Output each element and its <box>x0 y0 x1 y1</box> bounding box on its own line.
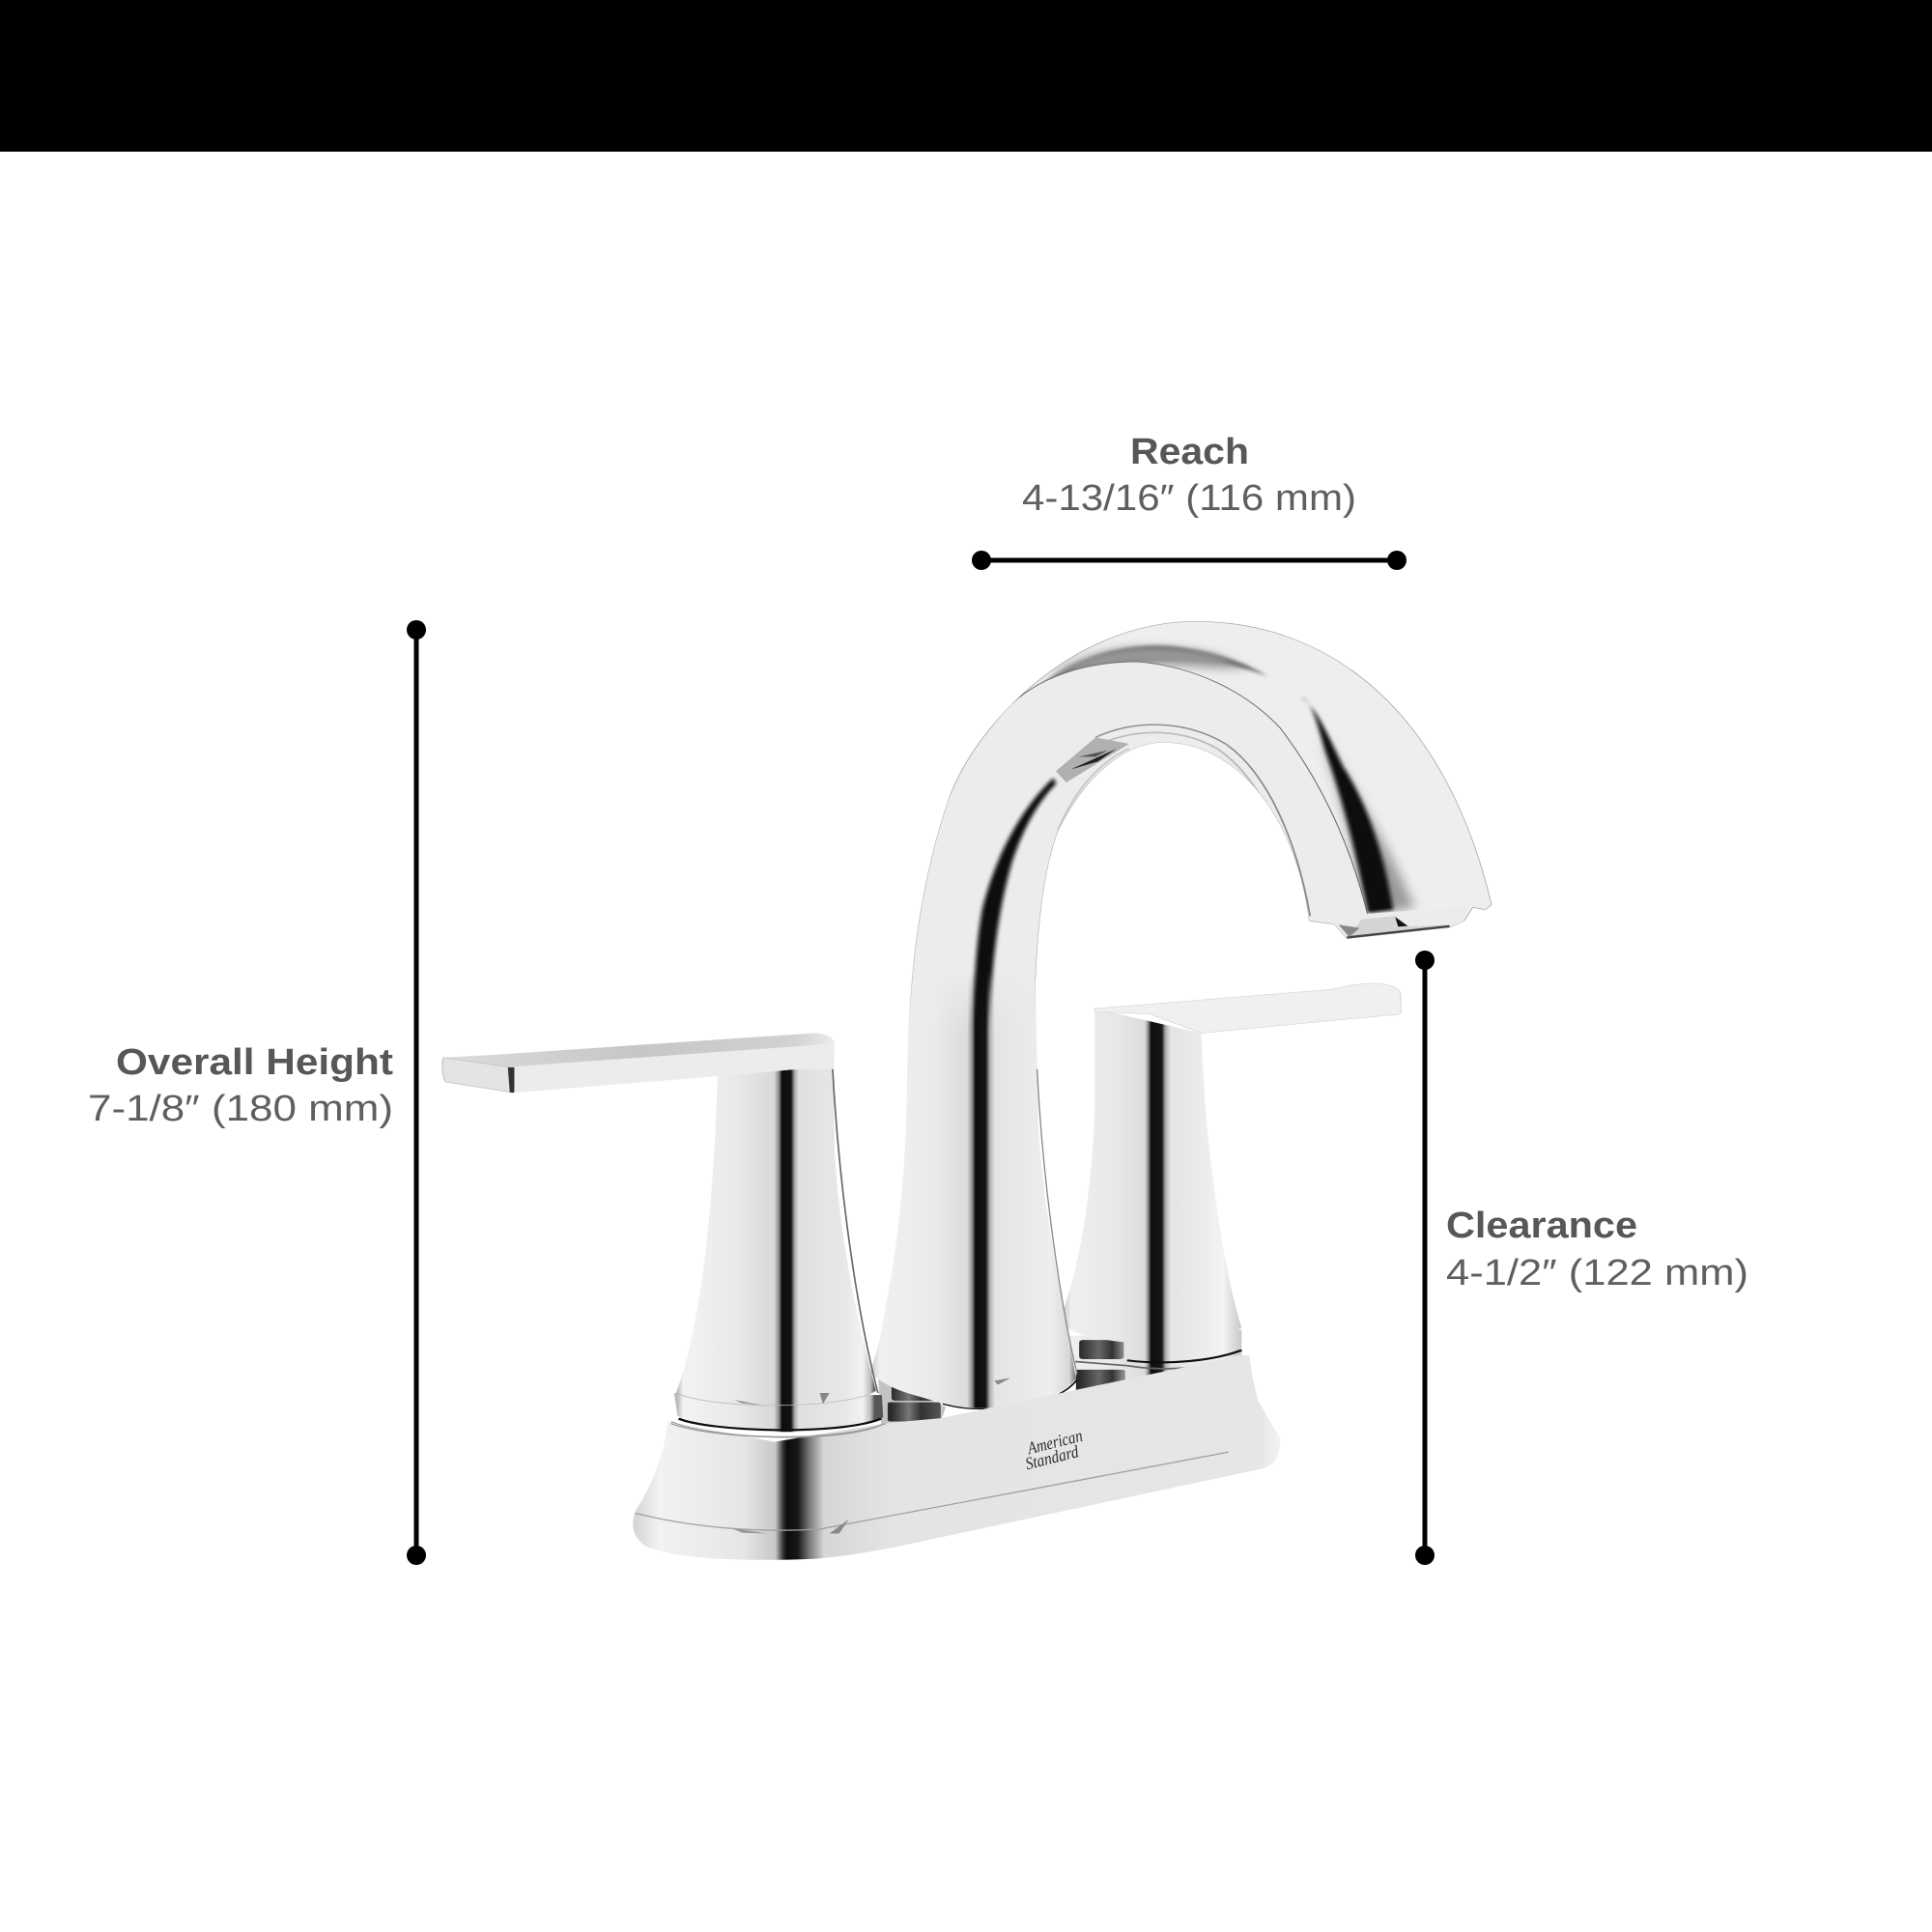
overall height label: 7-1/8″ (180 mm) <box>88 1089 393 1129</box>
inner rim lines <box>1095 724 1310 916</box>
clearance label <box>1446 1206 1748 1293</box>
spout column <box>870 971 1077 1427</box>
seam line <box>1006 662 1368 916</box>
reach label <box>1022 432 1356 519</box>
overall height dimension line <box>407 620 426 1565</box>
reach label: 4-13/16″ (116 mm) <box>1022 478 1356 519</box>
deck base <box>633 1355 1280 1560</box>
brand logo: Standard <box>1023 1441 1081 1473</box>
reach dimension line <box>972 551 1406 570</box>
right handle <box>1063 983 1401 1395</box>
reach label: Reach <box>1130 432 1249 472</box>
upper shadow <box>1037 643 1267 685</box>
clearance label: Clearance <box>1446 1206 1637 1246</box>
brand logo: American <box>1025 1426 1085 1458</box>
overall height label: Overall Height <box>116 1042 393 1083</box>
right dark streak <box>1301 696 1393 913</box>
brand logo <box>1020 1426 1088 1473</box>
aerator <box>1333 910 1464 939</box>
faucet illustration <box>442 621 1492 1560</box>
inner band <box>909 662 1368 1037</box>
spout arc <box>909 621 1492 1037</box>
right wide shade <box>1321 734 1414 913</box>
left dark streak <box>974 778 1056 1037</box>
left handle <box>442 1033 883 1437</box>
overall height label <box>88 1042 393 1129</box>
joint detail <box>1056 737 1129 782</box>
top black bar <box>0 0 1932 152</box>
clearance label: 4-1/2″ (122 mm) <box>1446 1253 1748 1293</box>
clearance dimension line <box>1415 951 1435 1565</box>
